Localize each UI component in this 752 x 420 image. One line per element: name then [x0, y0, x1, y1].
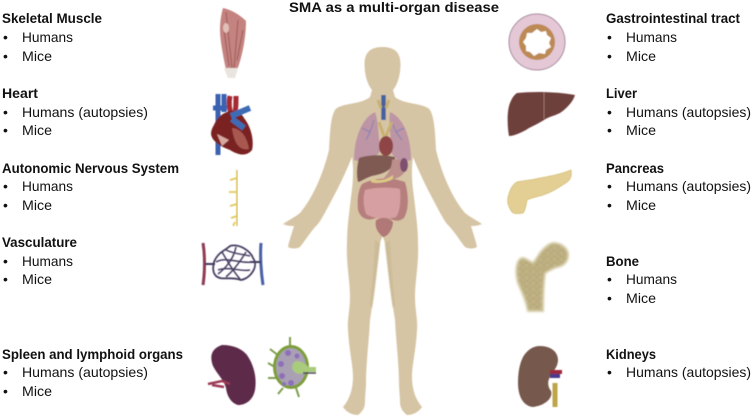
icon: femur	[516, 243, 568, 311]
bladder and rectum	[376, 218, 393, 237]
pancreas list: Humans (autopsies)	[626, 178, 751, 194]
trachea and thyroid	[381, 95, 386, 120]
spleen and lymphoid organs list: Mice	[22, 383, 52, 399]
vasculature list: Humans	[22, 253, 73, 269]
internal liver	[357, 155, 395, 182]
panel: liver	[508, 85, 751, 138]
liver list: •	[607, 122, 612, 138]
vasculature list	[3, 253, 73, 287]
small intestine	[364, 188, 400, 219]
skeletal muscle list: Humans	[22, 29, 73, 45]
gastrointestinal tract list: •	[607, 48, 612, 64]
gastrointestinal tract heading: Gastrointestinal tract	[606, 10, 740, 26]
panel: bone	[516, 243, 677, 311]
autonomic nervous system list	[3, 178, 73, 213]
skeletal muscle heading: Skeletal Muscle	[2, 10, 102, 26]
lungs	[354, 112, 411, 161]
body silhouette	[283, 47, 482, 415]
kidneys list: Humans (autopsies)	[626, 364, 751, 380]
bone list: Humans	[626, 271, 677, 287]
internal pancreas	[371, 175, 393, 183]
vasculature list: •	[3, 271, 8, 287]
panel: vasculature	[2, 234, 263, 287]
skeletal muscle list: Mice	[22, 48, 52, 64]
skeletal muscle list: •	[3, 29, 8, 45]
vasculature list: Mice	[22, 271, 52, 287]
bronchi	[362, 120, 404, 140]
spleen and lymphoid organs list: •	[3, 383, 8, 399]
autonomic nervous system list: Humans	[22, 178, 73, 194]
panel: spleen and lymphoid organs	[2, 337, 316, 405]
liver list: Humans (autopsies)	[626, 104, 751, 120]
bone list	[607, 271, 677, 306]
icon: nerve chain	[229, 170, 237, 226]
large intestine	[358, 178, 408, 221]
bone list: Mice	[626, 290, 656, 306]
spleen and lymphoid organs list: Humans (autopsies)	[22, 364, 148, 380]
vasculature list: •	[3, 253, 8, 269]
bone list: •	[607, 290, 612, 306]
pancreas list: •	[607, 197, 612, 213]
gastrointestinal tract list: •	[607, 29, 612, 45]
liver heading: Liver	[606, 85, 638, 101]
icon: pancreas	[508, 170, 571, 214]
icon: spleen	[208, 345, 256, 405]
spleen and lymphoid organs list	[3, 364, 148, 399]
bone heading: Bone	[606, 253, 639, 269]
liver list: Mice	[626, 122, 656, 138]
panel: pancreas	[508, 160, 751, 214]
vasculature heading: Vasculature	[2, 234, 77, 250]
kidneys list: •	[607, 364, 612, 380]
heart list: Humans (autopsies)	[22, 104, 148, 120]
panel: autonomic nervous system	[2, 160, 237, 226]
skeletal muscle list: •	[3, 48, 8, 64]
panel: skeletal muscle	[2, 8, 246, 78]
gastrointestinal tract list	[607, 29, 677, 64]
kidneys heading: Kidneys	[606, 346, 656, 362]
internal spleen	[400, 158, 408, 172]
gastrointestinal tract list: Mice	[626, 48, 656, 64]
autonomic nervous system list: Mice	[22, 197, 52, 213]
pancreas list	[607, 178, 751, 213]
panel: kidneys	[518, 346, 751, 407]
pancreas list: •	[607, 178, 612, 194]
icon: liver	[508, 92, 575, 136]
inner leg shading	[370, 240, 395, 308]
autonomic nervous system list: •	[3, 178, 8, 194]
heart list: Mice	[22, 122, 52, 138]
gastrointestinal tract list: Humans	[626, 29, 677, 45]
internal stomach	[382, 159, 405, 180]
pancreas heading: Pancreas	[606, 160, 664, 176]
internal heart	[379, 136, 393, 156]
icon: heart	[211, 94, 253, 155]
heart heading: Heart	[2, 85, 38, 101]
heart list: •	[3, 122, 8, 138]
spleen and lymphoid organs heading: Spleen and lymphoid organs	[2, 346, 183, 362]
liver list	[607, 104, 751, 138]
autonomic nervous system list: •	[3, 197, 8, 213]
heart list	[3, 104, 148, 138]
bone list: •	[607, 271, 612, 287]
icon: capillary bed	[203, 243, 263, 285]
pancreas list: Mice	[626, 197, 656, 213]
human body figure	[283, 47, 482, 415]
icon: intestine cross section	[509, 14, 565, 70]
spleen and lymphoid organs list: •	[3, 364, 8, 380]
panel: heart	[2, 85, 253, 155]
liver list: •	[607, 104, 612, 120]
icon: kidney	[518, 346, 562, 407]
icon: lymph node	[268, 337, 316, 397]
icon: thigh muscle	[220, 8, 246, 78]
panel: gastrointestinal tract	[509, 10, 740, 70]
autonomic nervous system heading: Autonomic Nervous System	[2, 160, 179, 176]
skeletal muscle list	[3, 29, 73, 64]
heart list: •	[3, 104, 8, 120]
